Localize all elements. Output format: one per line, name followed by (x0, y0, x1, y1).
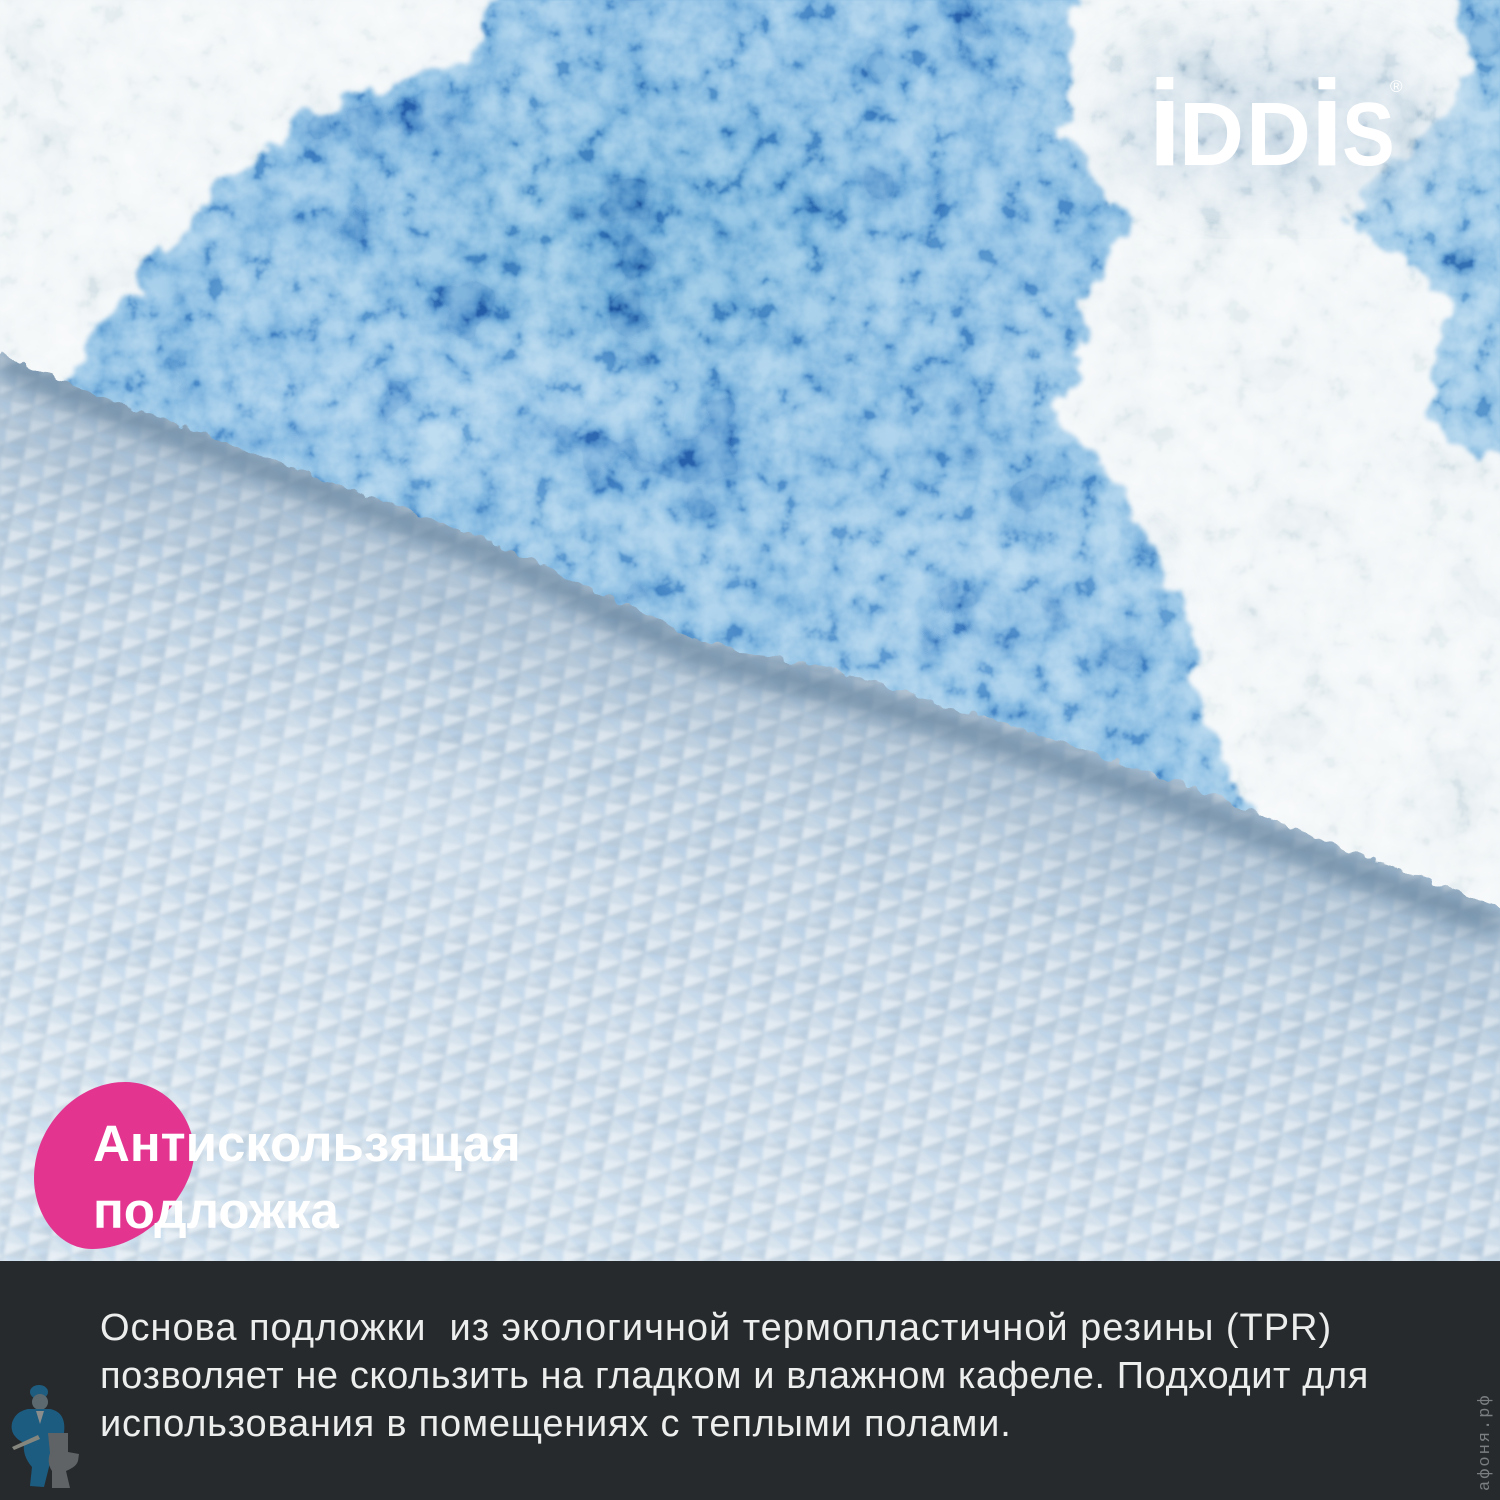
title: подложка (93, 1182, 339, 1239)
logo: IDDIS: D (1246, 85, 1311, 185)
title: Антискользящая (93, 1115, 521, 1172)
fold shadow under the mat (0, 362, 1500, 925)
logo: IDDIS: i (1310, 55, 1344, 191)
blue stripe (60, 0, 1500, 830)
panel: description bar (0, 1261, 1500, 1500)
logo: IDDIS: D (1179, 85, 1244, 185)
logo: IDDIS: i (1148, 55, 1182, 191)
loop texture (0, 0, 1500, 960)
shaggy mat surface (0, 0, 1500, 960)
logo: IDDIS: ® (1390, 77, 1403, 96)
description text: использования в помещениях с теплыми полами. (100, 1403, 1012, 1445)
title (93, 1115, 521, 1239)
logo: IDDIS: S (1342, 83, 1395, 184)
description text: Основа подложки из экологичной термопластичной резины (TPR) (100, 1307, 1332, 1349)
logo backdrop haze (1100, 35, 1440, 205)
description text (100, 1307, 1369, 1445)
description text: позволяет не скользить на гладком и влажном кафеле. Подходит для (100, 1355, 1369, 1397)
darker crevices (440, 100, 860, 360)
large clump shading (10, 0, 1500, 831)
watermark: afonya.rf: афоня.рф (1476, 1393, 1495, 1491)
icon: plumber with toilet watermark (12, 1385, 79, 1488)
logo: IDDIS (1148, 55, 1403, 191)
